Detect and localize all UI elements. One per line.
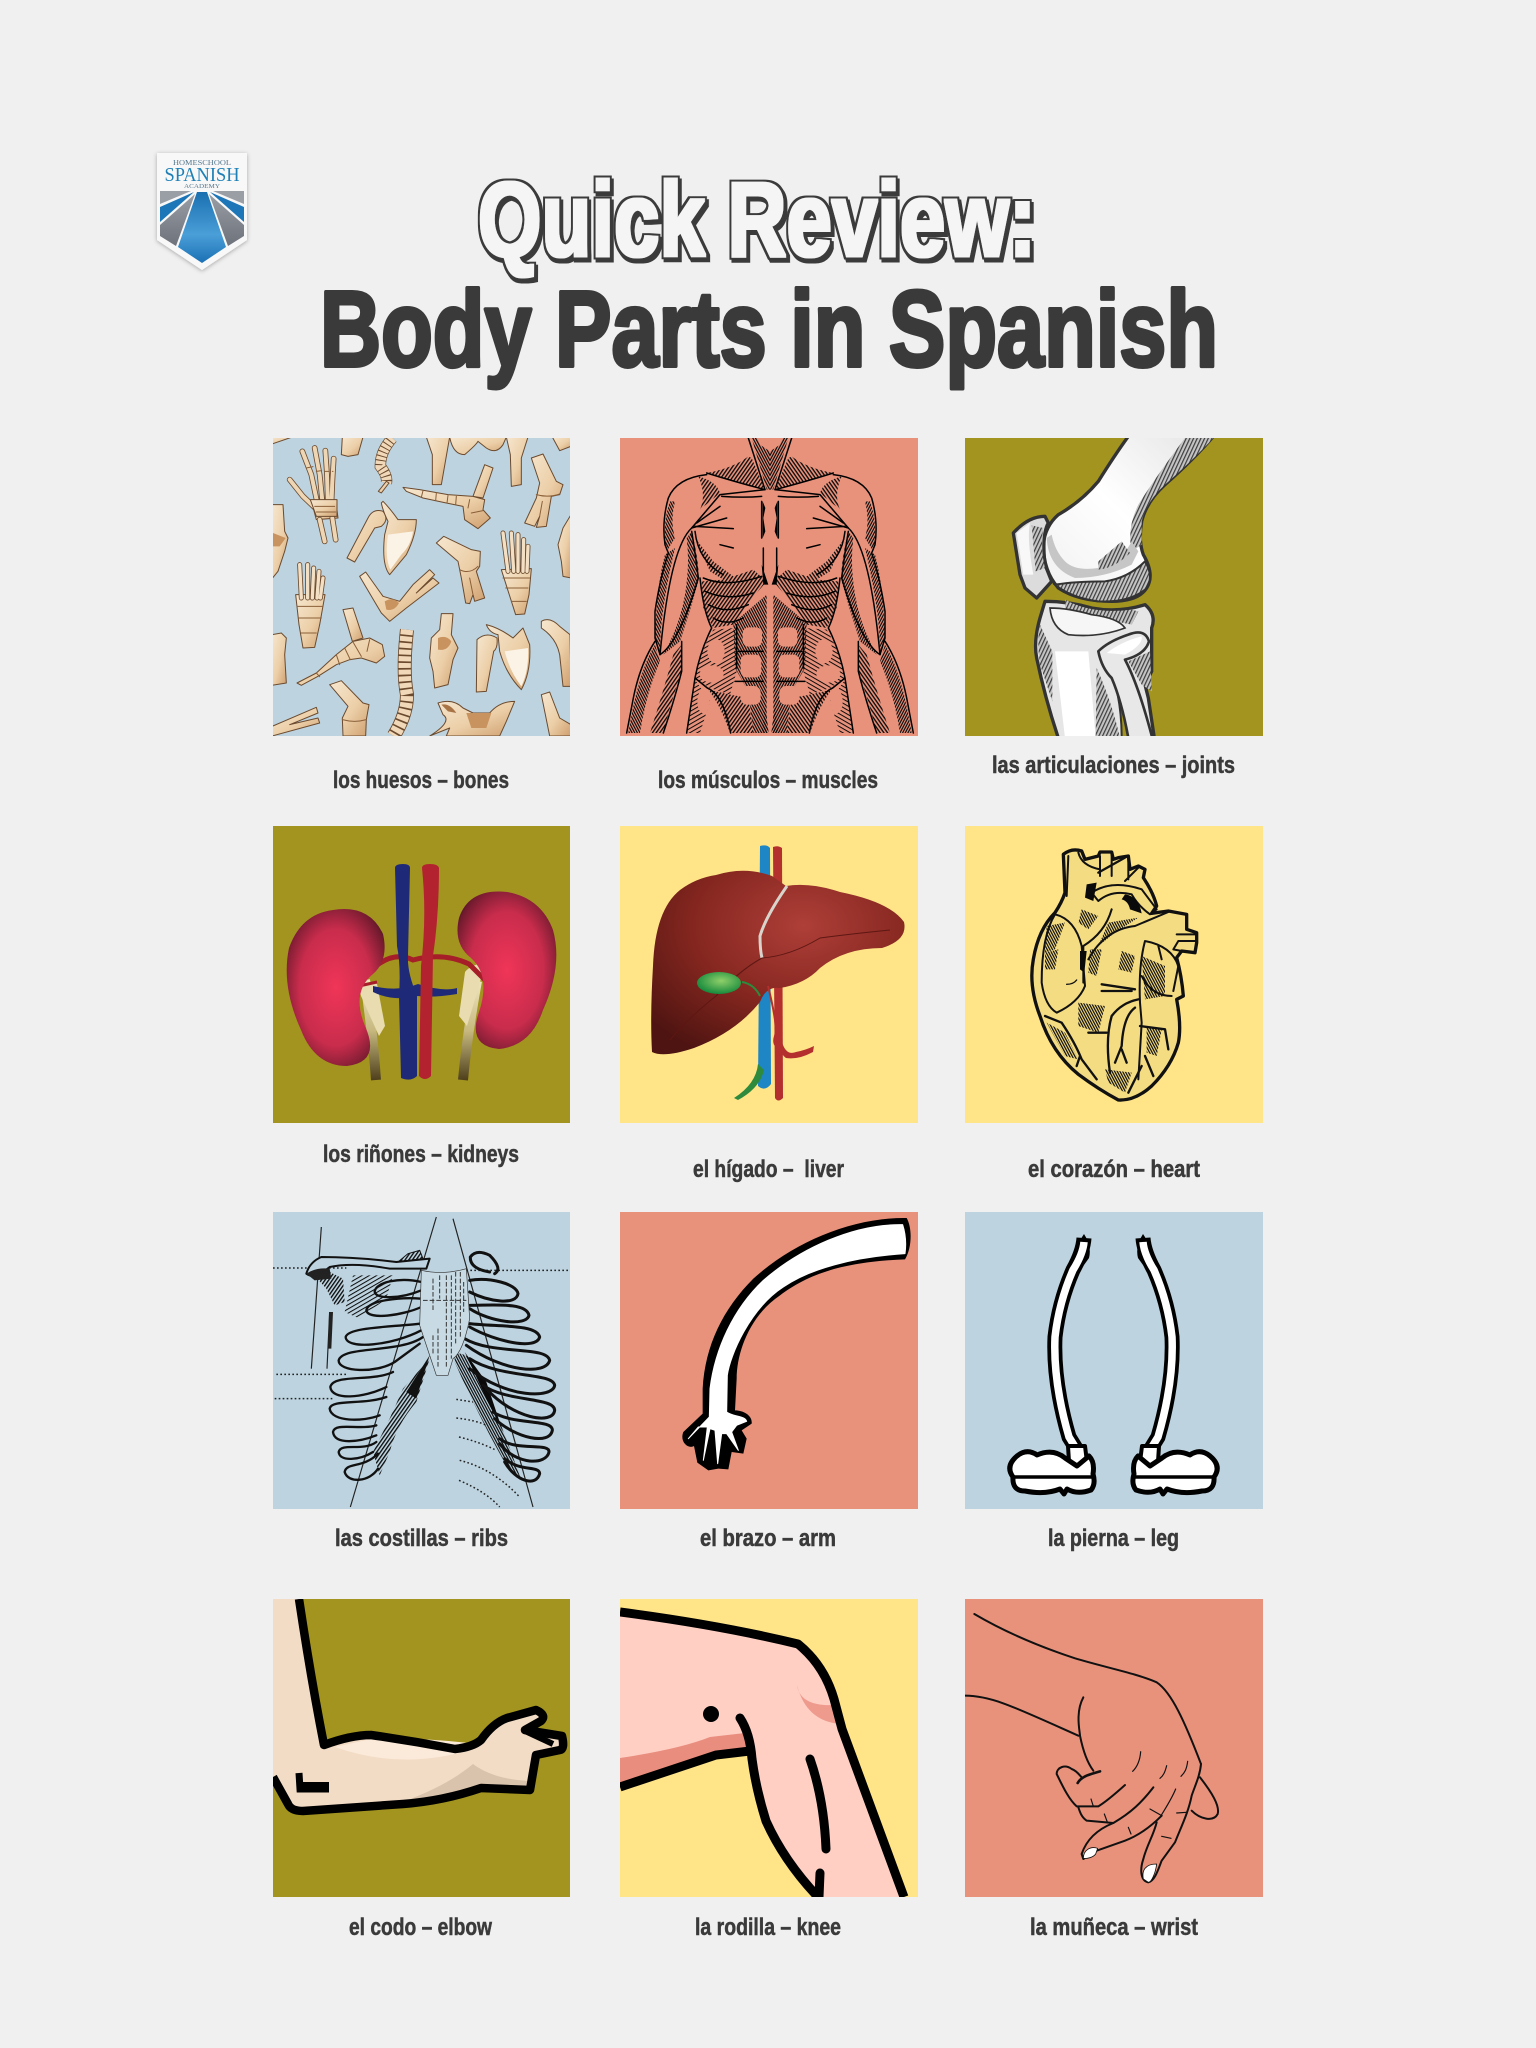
logo: Homeschool Spanish Academy shield: HOMESCHOOL bbox=[173, 158, 231, 167]
panel: wrist bbox=[965, 1599, 1263, 1897]
bone illustrations bbox=[272, 437, 571, 736]
panel: ribs bbox=[273, 1212, 570, 1509]
title: Quick Review: Quick Review: bbox=[478, 161, 1036, 279]
panel: knee bbox=[620, 1599, 918, 1897]
knee joint bones bbox=[1013, 436, 1213, 738]
label: el corazón: el corazón – heart bbox=[1028, 1156, 1200, 1183]
logo: Homeschool Spanish Academy shield: SPANISH bbox=[164, 164, 240, 186]
label: los huesos: los huesos – bones bbox=[333, 767, 509, 794]
panel: liver bbox=[620, 826, 918, 1123]
logo: Homeschool Spanish Academy shield: ACADEMY bbox=[184, 183, 220, 190]
hand line drawing bbox=[965, 1614, 1218, 1882]
panel: muscles bbox=[620, 438, 918, 736]
panel: joints bbox=[965, 438, 1263, 736]
cartoon legs and shoes bbox=[1010, 1234, 1217, 1494]
label: los músculos: los músculos – muscles bbox=[658, 767, 878, 794]
label: el brazo: el brazo – arm bbox=[700, 1525, 836, 1552]
title: Body Parts in Spanish: Body Parts in Spanish bbox=[320, 268, 1218, 389]
label: las costillas: las costillas – ribs bbox=[335, 1525, 508, 1552]
liver with vessels and gallbladder bbox=[651, 845, 905, 1100]
label: los riñones: los riñones – kidneys bbox=[323, 1141, 519, 1168]
logo: Homeschool Spanish Academy shield bbox=[157, 153, 247, 270]
panel: leg bbox=[965, 1212, 1263, 1509]
label: la rodilla: la rodilla – knee bbox=[695, 1914, 841, 1941]
panel: arm bbox=[620, 1212, 918, 1509]
label: el hígado: el hígado – liver bbox=[693, 1156, 844, 1183]
bent arm with elbow bbox=[273, 1599, 563, 1811]
rib cage engraving bbox=[273, 1217, 568, 1507]
bent leg with knee bbox=[620, 1612, 904, 1897]
kidneys and vessels bbox=[287, 864, 556, 1080]
label: el codo: el codo – elbow bbox=[349, 1914, 492, 1941]
panel: bones pattern bbox=[273, 438, 570, 736]
panel: heart bbox=[965, 826, 1263, 1123]
label: las articulaciones: las articulaciones – joints bbox=[992, 752, 1235, 779]
label: la pierna: la pierna – leg bbox=[1048, 1525, 1179, 1552]
panel: elbow bbox=[273, 1599, 570, 1897]
anatomical heart engraving bbox=[1032, 850, 1197, 1100]
muscular torso engraving bbox=[627, 438, 913, 733]
panel: kidneys bbox=[273, 826, 570, 1123]
label: la muñeca: la muñeca – wrist bbox=[1030, 1914, 1198, 1941]
cartoon arm bbox=[682, 1218, 911, 1470]
